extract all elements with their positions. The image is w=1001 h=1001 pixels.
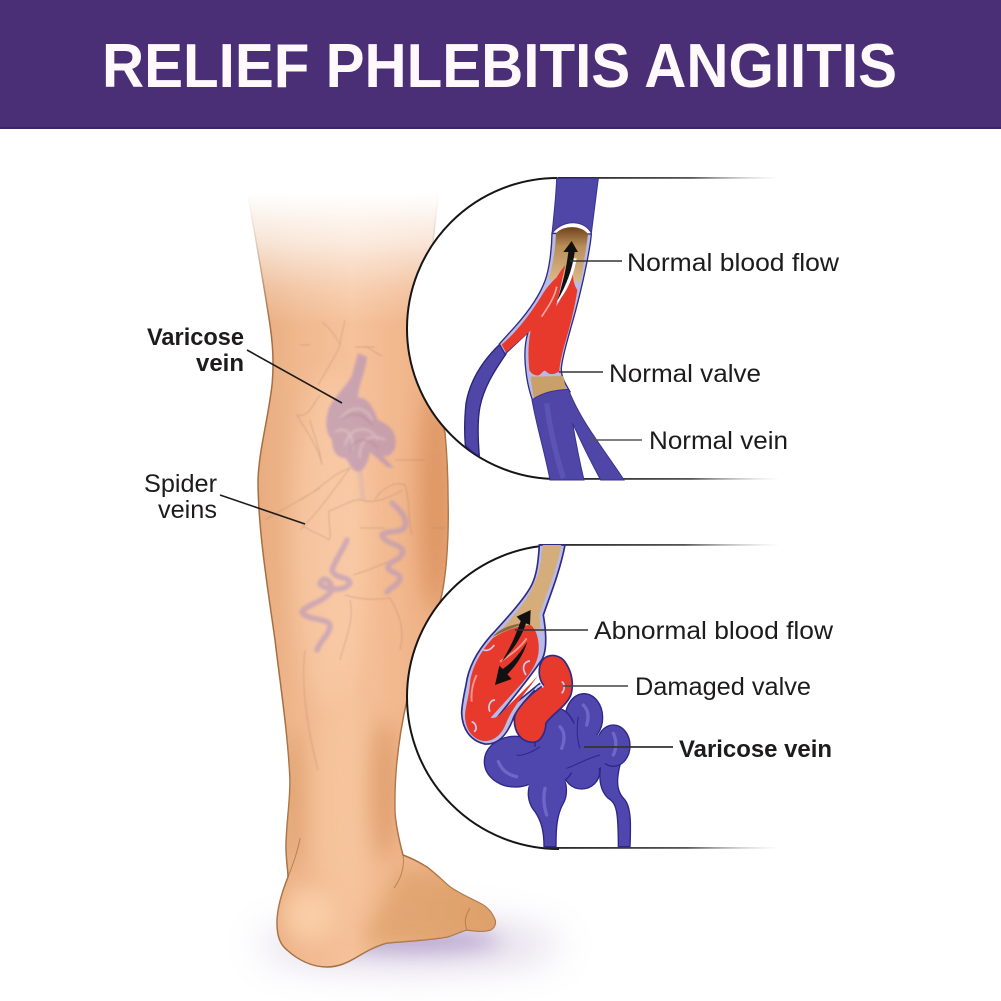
leader: damaged valve [563, 685, 628, 687]
label: varicose vein left: Varicose [147, 324, 244, 351]
dark shadow in sac [493, 622, 530, 637]
label: varicose vein left [147, 324, 342, 403]
upper tan lumen [548, 227, 588, 282]
text: varicose vein: Varicose vein [679, 736, 832, 763]
label: spider veins [144, 470, 305, 524]
red blood in main sac [465, 625, 539, 741]
panel: normal vein [407, 177, 840, 480]
valve flaps [472, 645, 564, 732]
label: spider veins: veins [158, 496, 217, 524]
panel outline [407, 544, 780, 849]
lower tan lumen [531, 376, 567, 398]
main vein wall and sac [462, 545, 565, 744]
second sac [514, 655, 572, 742]
floor shadow under foot [260, 925, 560, 965]
leg illustration [144, 150, 840, 967]
leader: abnormal blood flow [515, 629, 588, 631]
label: spider veins: Spider [144, 470, 217, 498]
flow arrows [502, 610, 531, 662]
label: varicose vein left: vein [196, 350, 244, 377]
leader: normal vein [590, 439, 642, 441]
normal vein diagram [465, 178, 624, 480]
flow arrow [557, 258, 577, 303]
text: normal blood flow: Normal blood flow [627, 249, 840, 277]
text: normal vein: Normal vein [649, 427, 788, 455]
leader: normal valve [559, 371, 603, 373]
title: RELIEF PHLEBITIS ANGIITIS [102, 32, 897, 101]
upper blue vein [552, 178, 598, 233]
spider veins [265, 320, 445, 770]
varicose vein diagram [462, 545, 630, 847]
text: damaged valve: Damaged valve [635, 673, 811, 701]
tan lumen [493, 545, 561, 638]
text: normal valve: Normal valve [609, 360, 761, 388]
side branch [465, 344, 506, 456]
leader: normal blood flow [570, 260, 622, 262]
tortuous superficial veins on leg [302, 503, 406, 650]
leader: varicose vein [584, 746, 673, 748]
header banner [0, 0, 1001, 129]
pale highlights [471, 638, 527, 702]
text: abnormal blood flow: Abnormal blood flow [594, 617, 834, 645]
fade at top of leg [225, 150, 450, 325]
leg shading [284, 370, 510, 945]
lower blue vein [532, 389, 624, 480]
panel outline [407, 177, 780, 480]
swollen blue vein cluster [484, 694, 630, 847]
dark creases [517, 717, 600, 768]
white highlight streak [542, 287, 557, 317]
varicose vein cluster on leg [326, 353, 396, 500]
red blood pool [502, 264, 577, 375]
ankle creases [288, 838, 470, 930]
vein wall [499, 233, 591, 401]
vein highlights [498, 705, 616, 815]
fill joining blobs [517, 723, 608, 802]
lower vein shading [547, 403, 563, 478]
panel: varicose vein [407, 544, 834, 849]
